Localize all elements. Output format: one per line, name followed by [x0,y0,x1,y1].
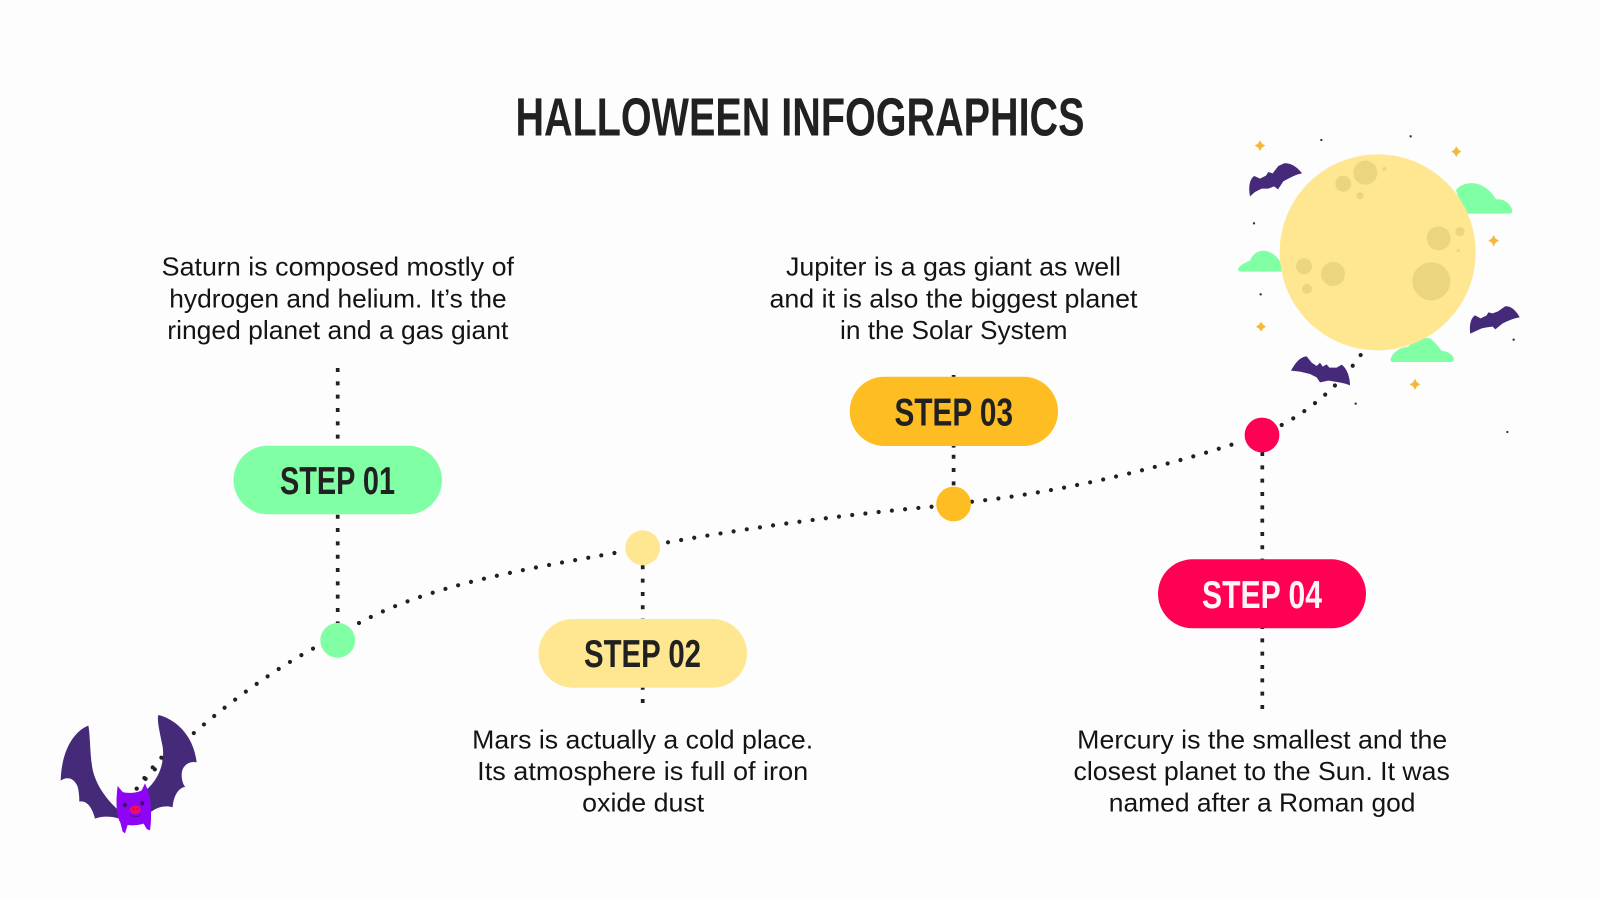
step 02 text [472,724,813,818]
icon: small bats [1249,163,1520,385]
icon: big bat [61,715,197,833]
icon: gold stars [1255,140,1499,390]
step 03 text [770,252,1138,345]
step 01 text [162,252,515,345]
bat snout [129,805,141,817]
title: HALLOWEEN INFOGRAPHICS [516,87,1084,147]
step 01 text: Saturn is composed mostly of [162,252,515,282]
small sky dots [1253,135,1515,433]
step 03 marker [936,487,971,521]
connector lines [338,368,1262,710]
step 03 text: Jupiter is a gas giant as well [786,252,1121,282]
step 04 text: named after a Roman god [1109,788,1416,818]
step 02 text: Its atmosphere is full of iron [477,756,808,786]
step 03 pill [850,377,1058,446]
bat body [117,783,151,833]
icon: clouds [1238,183,1512,362]
route dots over wing gap [135,756,163,791]
dotted route [137,355,1361,789]
step 04 pill [1158,559,1366,628]
step 04 pill: STEP 04 [1202,574,1322,617]
step 03 pill: STEP 03 [894,391,1013,434]
step 02 pill: STEP 02 [584,633,701,676]
step 01 text: hydrogen and helium. It’s the [169,283,507,313]
moon scene [1238,135,1520,433]
bat eyes [123,801,144,807]
step 02 marker [625,530,660,565]
step 04 text: closest planet to the Sun. It was [1074,756,1450,786]
step 01 text: ringed planet and a gas giant [167,315,509,345]
icon: moon [1280,154,1476,350]
step 02 text: oxide dust [582,788,705,818]
step 02 pill [538,619,747,688]
step 04 text: Mercury is the smallest and the [1077,724,1447,754]
step 03 text: in the Solar System [840,315,1068,345]
step 01 pill [234,446,442,514]
step 01 marker [320,623,355,658]
step 01 pill: STEP 01 [280,460,395,503]
moon craters [1296,161,1465,300]
step 02 text: Mars is actually a cold place. [472,724,813,754]
step 03 text: and it is also the biggest planet [770,283,1138,313]
step 04 text [1074,724,1450,818]
step 04 marker [1245,418,1279,452]
bat wings [61,715,197,819]
